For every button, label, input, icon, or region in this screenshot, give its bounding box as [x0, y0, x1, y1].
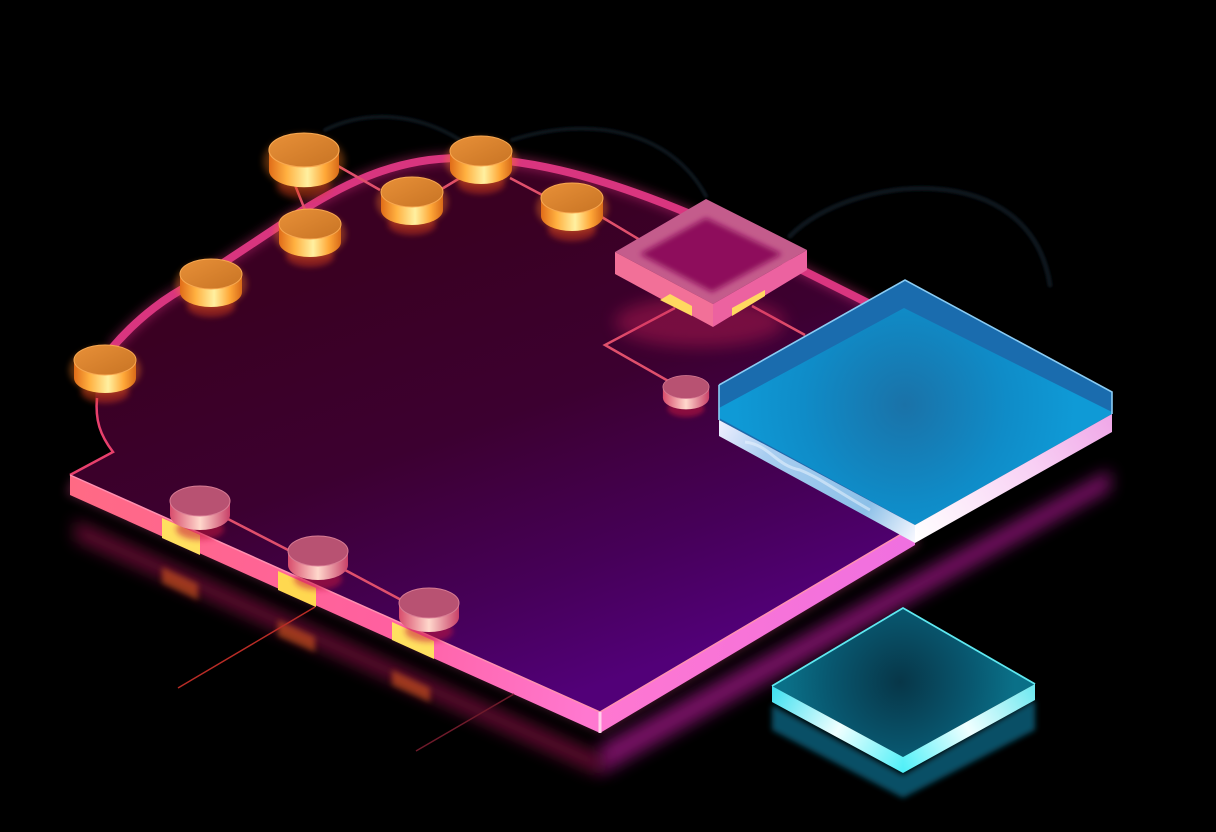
small teal glass tile: [772, 608, 1035, 798]
translucent chip: [615, 199, 807, 347]
plate reflection glow: [75, 445, 1110, 775]
plate pink rim glow: [112, 158, 870, 348]
dark background wires: [325, 117, 1050, 285]
plate edge glow: [70, 485, 915, 722]
yellow contact pads: [162, 518, 434, 659]
orange capacitor nodes: [69, 133, 608, 403]
plate top surface: [70, 155, 915, 712]
plate outline trace: [70, 398, 113, 475]
large blue glass tile: [719, 280, 1112, 543]
circuit traces: [226, 166, 805, 602]
plate edge thickness: [70, 475, 915, 733]
red lead lines: [178, 607, 514, 751]
plate pink rim: [112, 158, 870, 348]
pink discs on plate edge: [170, 375, 709, 642]
main plate: [70, 155, 915, 733]
